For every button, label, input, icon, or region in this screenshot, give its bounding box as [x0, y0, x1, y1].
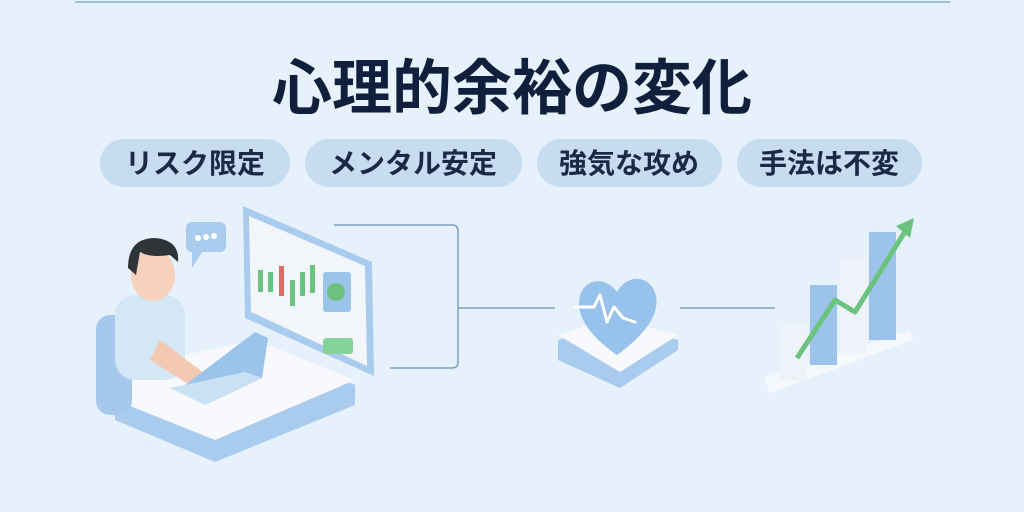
chair: [96, 315, 132, 415]
pill: aggressive: 強気な攻め: [559, 148, 699, 179]
pill: risk: [100, 139, 290, 187]
connector lines: [334, 225, 775, 368]
pill: mental: [305, 139, 522, 187]
title: 心理的余裕の変化: [272, 55, 752, 122]
pill: aggressive: [537, 139, 722, 187]
illustration: trader at desk: [96, 206, 374, 462]
speech bubble icon: [186, 222, 226, 268]
pill: method: [737, 139, 922, 187]
pill: risk: リスク限定: [125, 148, 265, 179]
icon: bar chart with arrow: [764, 218, 914, 393]
person: [115, 295, 185, 380]
icon: heart on base: [558, 279, 678, 388]
pills: [100, 139, 922, 187]
desk: [115, 345, 355, 462]
laptop: [185, 332, 268, 405]
monitor: [243, 206, 374, 376]
pill: method: 手法は不変: [759, 148, 899, 179]
pill: mental: メンタル安定: [329, 148, 497, 179]
